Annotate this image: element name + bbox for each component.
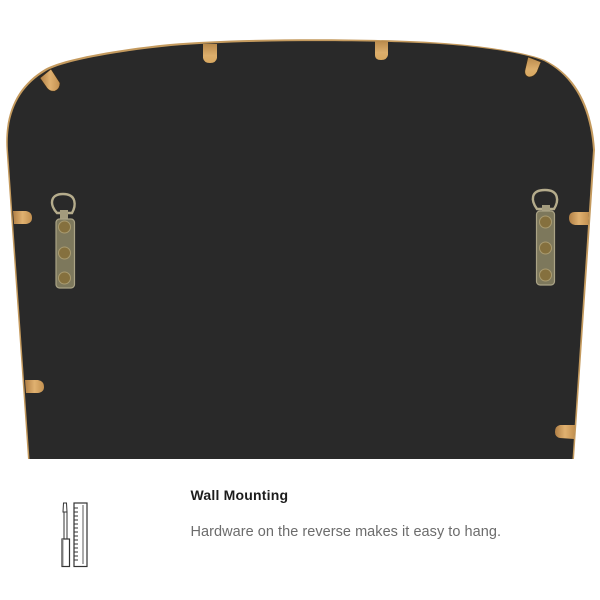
clip: right upper [569, 212, 589, 225]
clip: top right corner [525, 57, 541, 77]
description: Hardware on the reverse makes it easy to hang. [190, 524, 501, 540]
clip: top centre left [203, 44, 217, 63]
clip: top centre right [375, 41, 388, 60]
hanger: right D-ring bracket [533, 190, 557, 285]
mirror frame [6, 39, 595, 459]
heading: Wall Mounting [190, 487, 288, 503]
clip: top left corner [40, 69, 60, 91]
clip: right lower [555, 425, 575, 439]
icon: screwdriver and ruler [62, 503, 87, 566]
clip: left upper [13, 211, 32, 224]
clip: left lower [25, 380, 44, 393]
hanger: left D-ring bracket [52, 194, 75, 288]
